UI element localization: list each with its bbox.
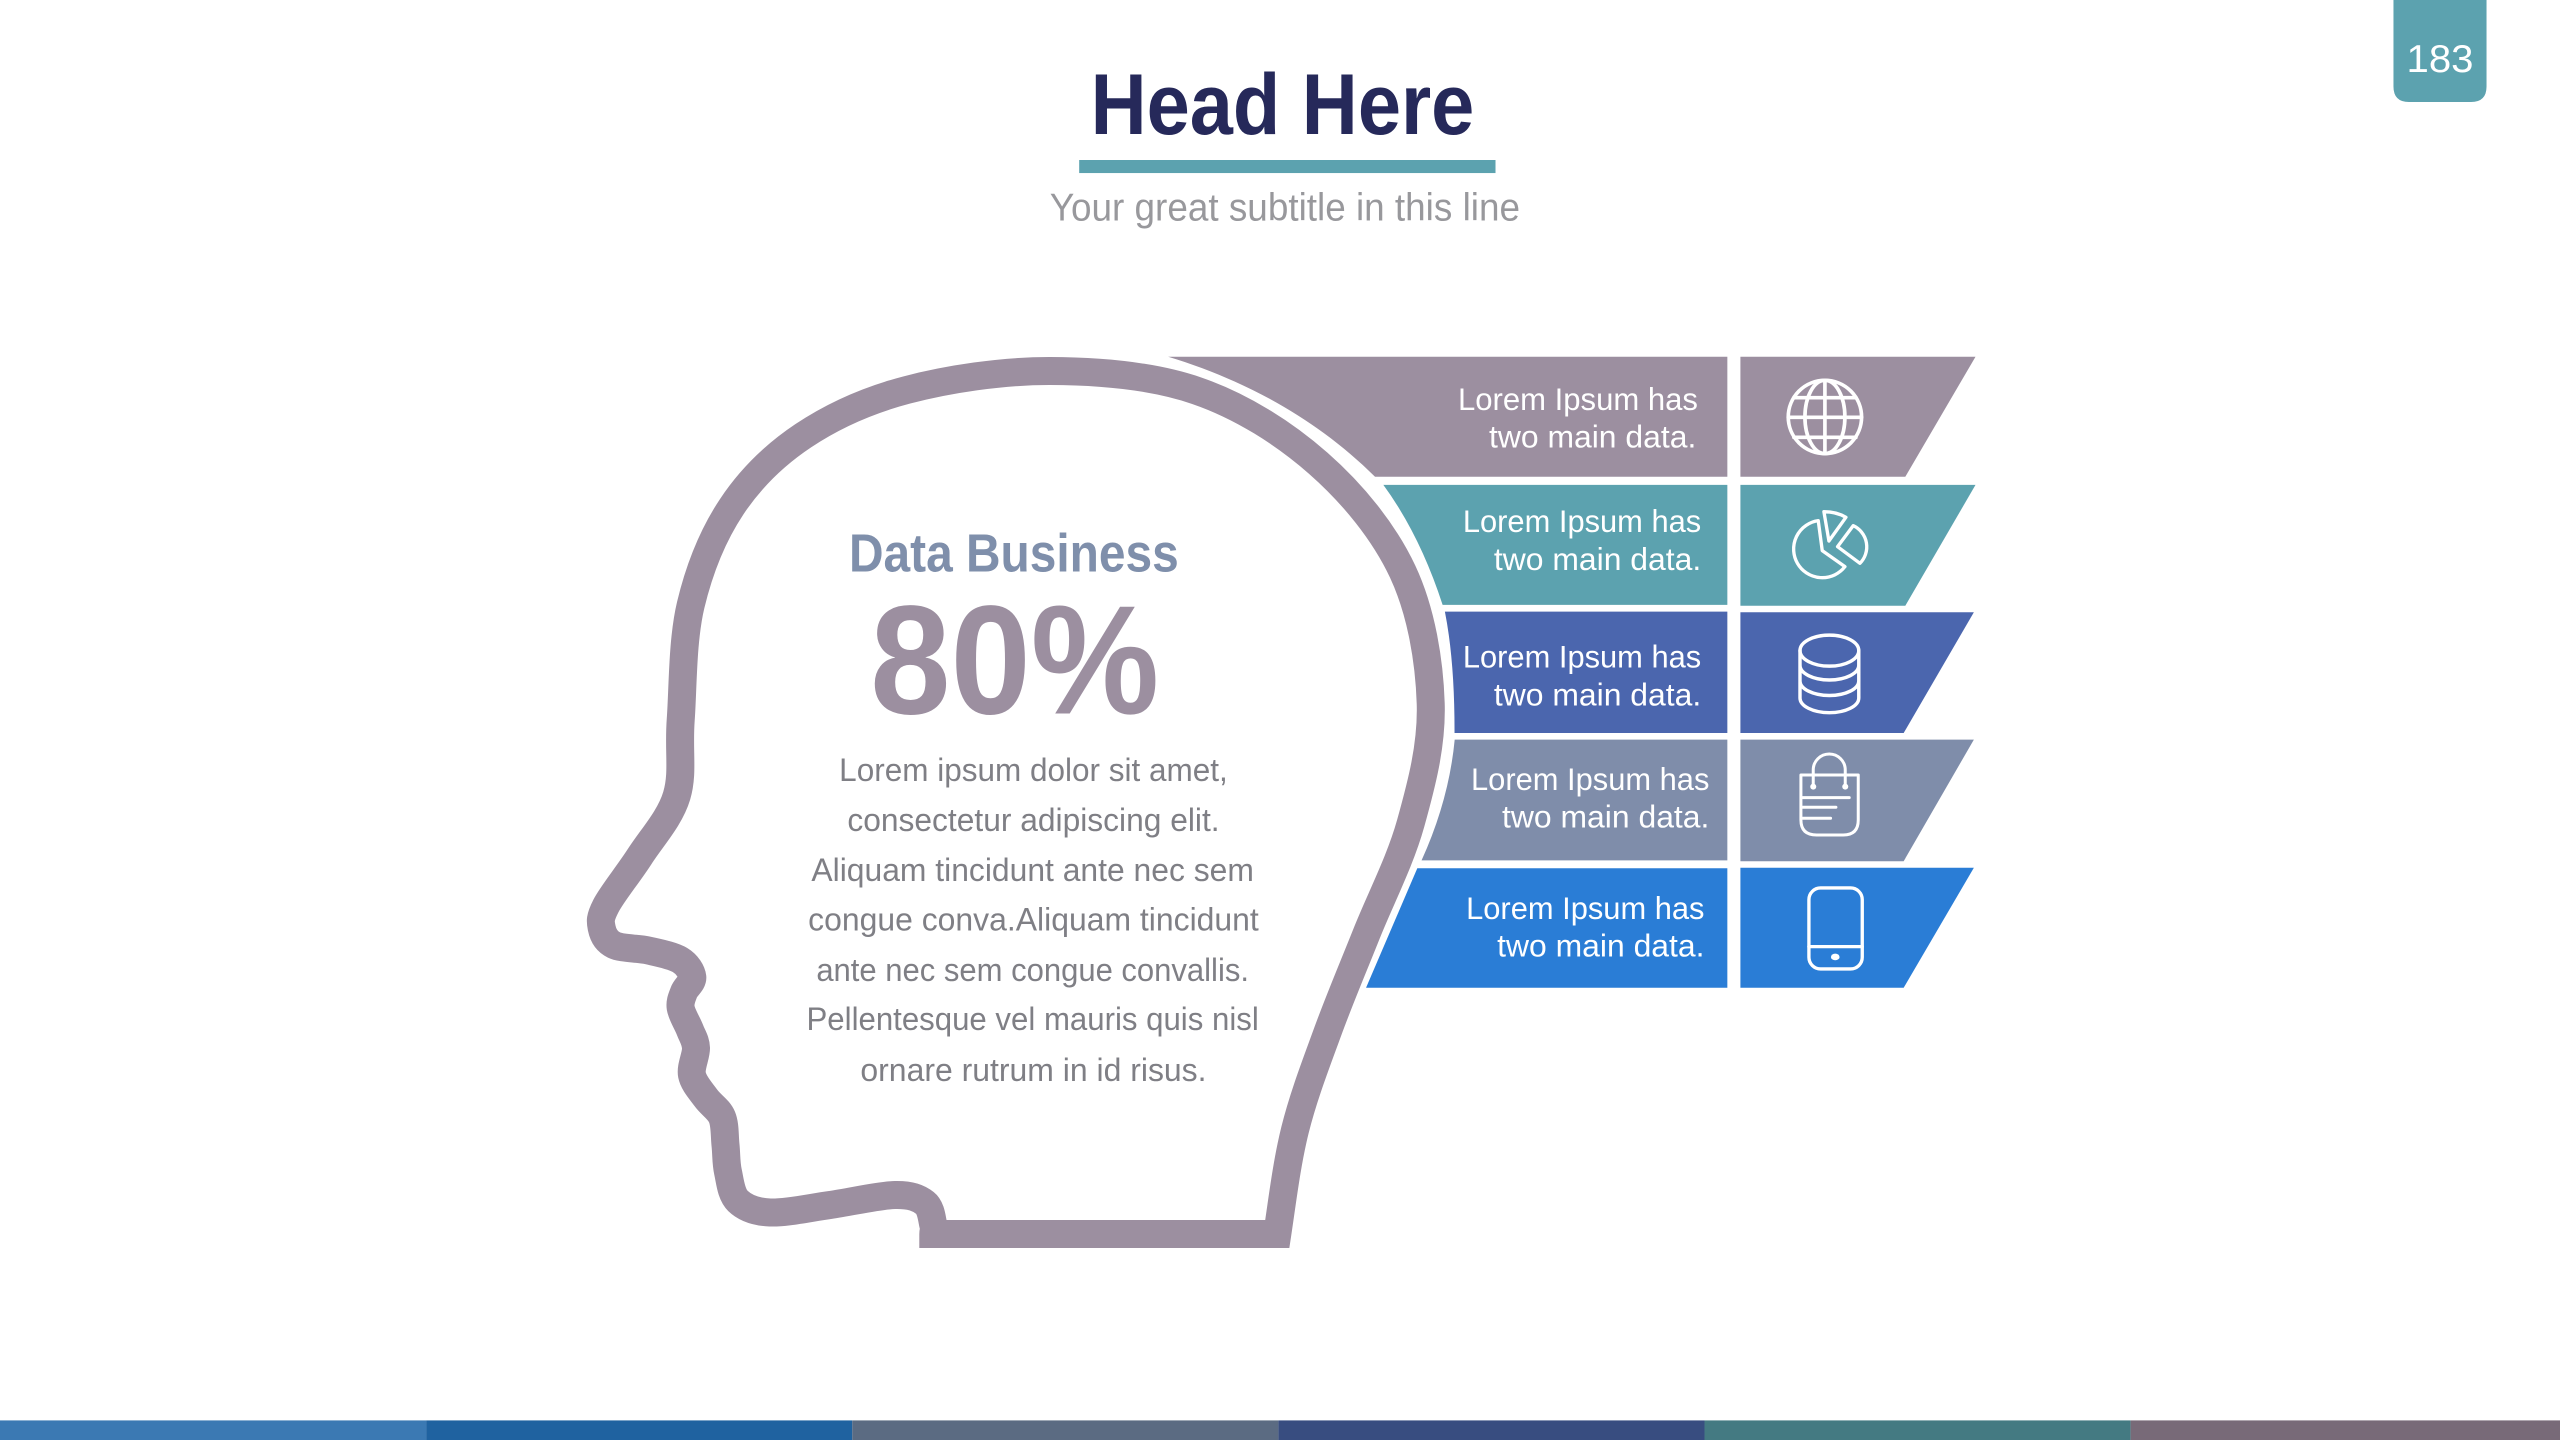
band 5: smartphone bbox=[1366, 868, 1974, 988]
band 1: globe: Lorem Ipsum has bbox=[1458, 381, 1698, 417]
page number tab: 183 bbox=[2407, 38, 2473, 81]
band 3: database: Lorem Ipsum has bbox=[1463, 639, 1701, 675]
band 1: globe bbox=[1168, 357, 1976, 477]
title underline bbox=[1079, 160, 1496, 173]
title: Head Here bbox=[1091, 57, 1474, 153]
footer colour bar bbox=[0, 1420, 2560, 1440]
icon: pie chart bbox=[1794, 512, 1867, 578]
body paragraph: ante nec sem congue convallis. bbox=[816, 951, 1249, 988]
body paragraph: ornare rutrum in id risus. bbox=[860, 1051, 1207, 1088]
icon: smartphone bbox=[1809, 888, 1862, 969]
subtitle: Your great subtitle in this line bbox=[1050, 186, 1520, 229]
band 3: database: two main data. bbox=[1494, 676, 1701, 712]
page number tab bbox=[2393, 0, 2487, 102]
band 5: smartphone: two main data. bbox=[1497, 928, 1704, 964]
head outline bbox=[601, 371, 1431, 1234]
icon: database bbox=[1800, 635, 1859, 713]
body paragraph: consectetur adipiscing elit. bbox=[847, 801, 1220, 838]
body paragraph: Aliquam tincidunt ante nec sem bbox=[811, 851, 1254, 888]
band 2: pie chart: Lorem Ipsum has bbox=[1463, 503, 1701, 539]
band 1: globe: two main data. bbox=[1489, 418, 1696, 454]
body paragraph: Pellentesque vel mauris quis nisl bbox=[807, 1000, 1259, 1037]
big percentage: 80% bbox=[870, 573, 1159, 746]
band 2: pie chart bbox=[1383, 485, 1976, 606]
band 5: smartphone: Lorem Ipsum has bbox=[1466, 890, 1704, 926]
body paragraph bbox=[807, 751, 1259, 1088]
band 4: shopping bag: two main data. bbox=[1502, 799, 1709, 835]
body paragraph: Lorem ipsum dolor sit amet, bbox=[839, 751, 1228, 788]
band 3: database bbox=[1445, 612, 1974, 733]
icon: globe bbox=[1788, 380, 1862, 454]
band 4: shopping bag bbox=[1422, 740, 1974, 861]
heading: data business: Data Business bbox=[849, 523, 1179, 583]
icon: shopping bag bbox=[1801, 754, 1858, 835]
body paragraph: congue conva.Aliquam tincidunt bbox=[808, 901, 1259, 938]
band 4: shopping bag: Lorem Ipsum has bbox=[1471, 761, 1709, 797]
band 2: pie chart: two main data. bbox=[1494, 541, 1701, 577]
